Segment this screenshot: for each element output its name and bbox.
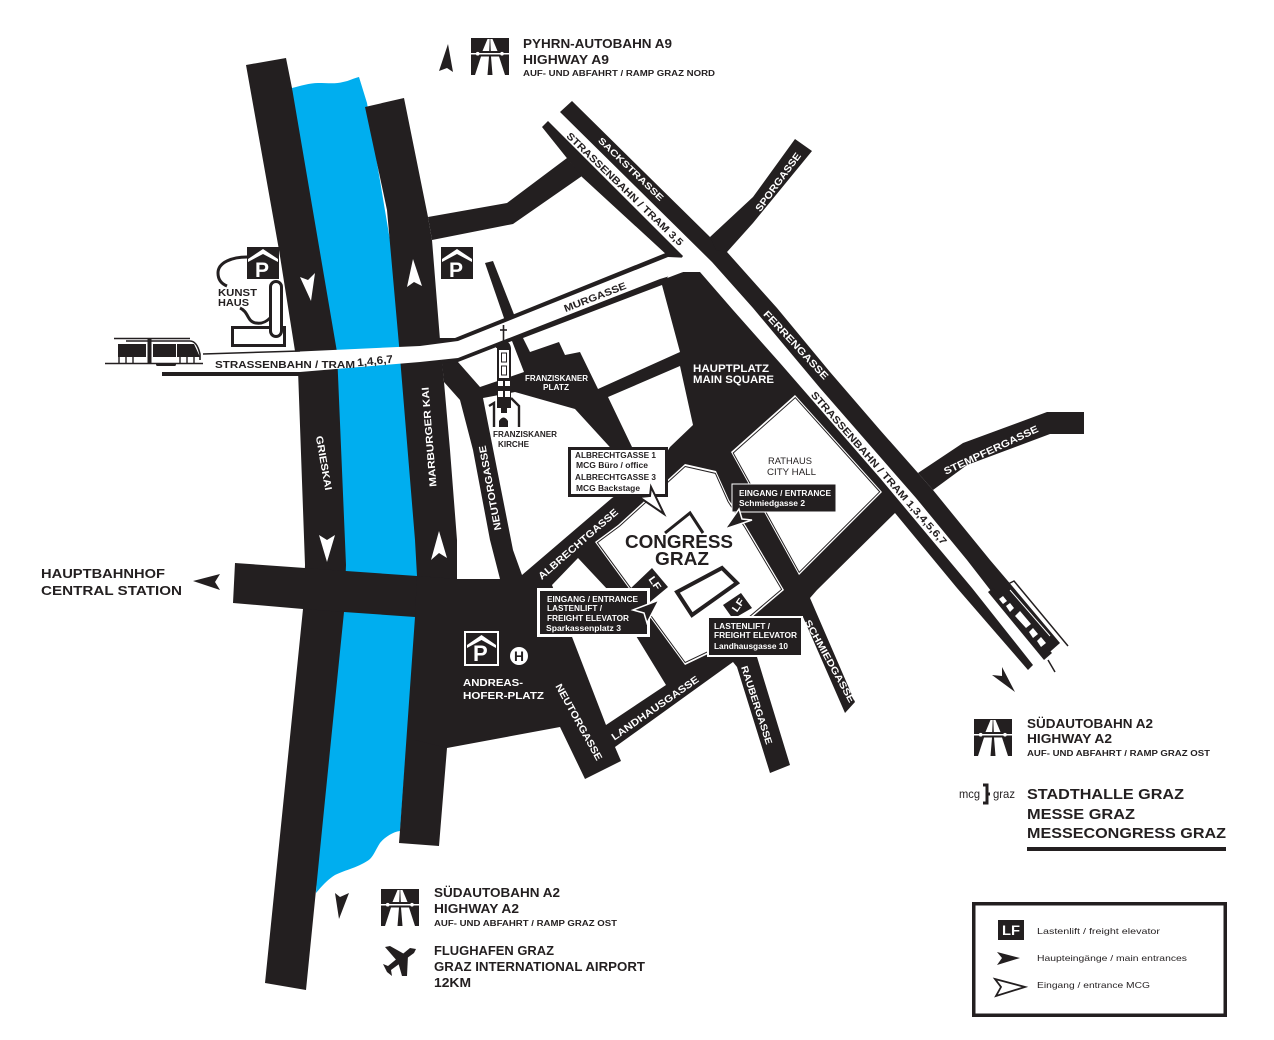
congress roof chevron <box>665 513 703 533</box>
highway info: A9: HIGHWAY A9 <box>523 53 609 67</box>
Murgasse tram edge <box>438 252 683 364</box>
road: Sporgasse <box>710 139 812 252</box>
icon: parking Andreas-Hofer-Platz <box>465 632 498 666</box>
direction arrows on roads <box>300 259 447 562</box>
street label: Albrechtgasse: ALBRECHTGASSE <box>537 507 621 582</box>
icon: bus stop H <box>510 647 528 665</box>
Kunsthaus building <box>218 257 284 346</box>
venue names <box>1027 786 1226 851</box>
block: Rathaus <box>731 395 882 575</box>
icon: tram west <box>105 338 203 366</box>
Kunsthaus building: HAUS <box>218 298 249 309</box>
icon: motorway A2 south <box>381 889 419 926</box>
Kunsthaus building: KUNST <box>218 288 257 299</box>
road: Grieskai <box>246 58 346 990</box>
block: west of Hauptplatz <box>608 366 693 480</box>
airport info: FLUGHAFEN GRAZ <box>434 944 554 958</box>
arrow: Marburger Kai upper <box>407 259 422 287</box>
road: short lane to Murgasse <box>485 261 515 321</box>
arrow: to central station <box>193 574 220 590</box>
icon: bus stop H: H <box>514 648 524 664</box>
street label: Strassenbahn 3,5: STRASSENBAHN / TRAM 3,5 <box>564 131 685 249</box>
Rathaus outline <box>733 398 880 572</box>
airport info <box>434 944 645 990</box>
legend: LF key letters: LF <box>1002 922 1020 938</box>
callout: Schmiedgasse entrance: EINGANG / ENTRANCE <box>739 489 832 498</box>
legend: LF key <box>998 920 1024 940</box>
legend: main entrance arrow <box>997 952 1020 965</box>
block: north of Hauptplatz <box>523 285 680 389</box>
legend: MCG entrance arrow <box>995 979 1025 996</box>
LF tag 1 <box>630 568 668 602</box>
road: main east-west road <box>233 563 530 620</box>
highway info: A2 south: SÜDAUTOBAHN A2 <box>434 885 560 900</box>
callout: Landhausgasse freight elevator: LASTENLIFT / <box>714 622 771 631</box>
icon: parking Marburger Kai: P <box>449 259 463 282</box>
block: Neutorgasse to Albrechtgasse <box>483 392 640 575</box>
icon: motorway A2 east <box>974 719 1012 756</box>
legend: main entrance text: Haupteingänge / main entrances <box>1037 953 1187 963</box>
street label: Neutorgasse south: NEUTORGASSE <box>552 682 604 763</box>
street label: Stempfergasse: STEMPFERGASSE <box>942 424 1041 478</box>
arrow: Grieskai upper <box>300 273 315 301</box>
street label: Ferrengasse: FERRENGASSE <box>761 309 830 383</box>
label: Franziskaner Kirche <box>493 430 557 449</box>
street label: Marburger Kai: MARBURGER KAI <box>420 386 439 487</box>
label: central station <box>41 566 182 598</box>
highway info: A2 south: AUF- UND ABFAHRT / RAMP GRAZ OST <box>434 919 617 928</box>
callout: Albrechtgasse: MCG Backstage <box>576 484 641 493</box>
tram rail edges <box>162 351 300 374</box>
title: Congress Graz <box>625 531 733 569</box>
LF tag 2 <box>723 593 752 619</box>
LF tag 2: LF <box>730 597 747 614</box>
label: Andreas-Hofer-Platz: ANDREAS- <box>463 677 524 689</box>
street labels <box>215 131 1041 763</box>
logo: mcg graz <box>959 785 1015 803</box>
LF tag 1: LF <box>646 575 663 592</box>
airport info: 12KM <box>434 976 471 990</box>
highway info: A2 east <box>1027 716 1210 758</box>
arrow: south-west to A2 <box>335 893 349 919</box>
street label: Sackstrasse: SACKSTRASSE <box>596 135 666 203</box>
street label: Strassenbahn west: STRASSENBAHN / TRAM <box>215 360 355 371</box>
legend: freight elevator text: Lastenlift / freight elevator <box>1037 926 1160 936</box>
callout: Albrechtgasse: ALBRECHTGASSE 1 <box>575 451 657 460</box>
icon: Franziskaner church <box>489 325 519 427</box>
arrow: Marburger Kai lower <box>431 531 447 560</box>
callout: Sparkassenplatz entrance: FREIGHT ELEVATOR <box>547 614 629 623</box>
callout: Sparkassenplatz entrance: LASTENLIFT / <box>547 604 603 613</box>
pointer: Schmiedgasse entrance <box>725 509 752 529</box>
arrow: Grieskai lower <box>319 535 335 562</box>
street label: Sporgasse: SPORGASSE <box>754 151 804 214</box>
block: Congress building <box>595 464 784 665</box>
street label: tram numbers west: 1,4,6,7 <box>357 354 394 369</box>
pointer: Sparkassenplatz entrance <box>633 600 659 623</box>
logo: mcg graz: graz <box>993 787 1015 801</box>
city centre streets <box>415 271 895 779</box>
highway info: A9: PYHRN-AUTOBAHN A9 <box>523 37 672 51</box>
road: north tram side strip <box>542 121 683 256</box>
highway info: A2 east: AUF- UND ABFAHRT / RAMP GRAZ OST <box>1027 749 1210 758</box>
label: Hauptplatz: MAIN SQUARE <box>693 374 774 386</box>
street network <box>233 58 1084 990</box>
label: Franziskaner Kirche: FRANZISKANER <box>493 430 557 439</box>
icon: parking Kunsthaus: P <box>255 259 269 282</box>
label: central station: HAUPTBAHNHOF <box>41 566 165 581</box>
highway info: A9 <box>523 37 715 78</box>
legend: MCG entrance text: Eingang / entrance MCG <box>1037 980 1150 990</box>
block: beside the church <box>458 341 524 387</box>
label: Rathaus: CITY HALL <box>767 467 816 478</box>
highway info: A2 east: SÜDAUTOBAHN A2 <box>1027 716 1153 731</box>
label: Franziskaner Kirche: KIRCHE <box>498 440 530 449</box>
legend <box>974 904 1225 1015</box>
venue names: MESSECONGRESS GRAZ <box>1027 825 1226 842</box>
label: Andreas-Hofer-Platz <box>463 677 545 702</box>
airport info: GRAZ INTERNATIONAL AIRPORT <box>434 960 645 974</box>
icon: parking Andreas-Hofer-Platz: P <box>473 641 488 666</box>
street label: Schmiedgasse: SCHMIEDGASSE <box>802 618 856 705</box>
road: south tram side strip <box>880 478 1033 670</box>
street label: Landhausgasse: LANDHAUSGASSE <box>610 674 702 743</box>
callout: Sparkassenplatz entrance <box>538 590 659 636</box>
highway info: A2 south <box>434 885 617 928</box>
venue names: STADTHALLE GRAZ <box>1027 786 1184 803</box>
label: Franziskaner Platz <box>525 374 588 392</box>
label: Andreas-Hofer-Platz: HOFER-PLATZ <box>463 690 545 702</box>
highway info: A9: AUF- UND ABFAHRT / RAMP GRAZ NORD <box>523 69 715 78</box>
highway info: A2 south: HIGHWAY A2 <box>434 902 519 916</box>
callout: Landhausgasse freight elevator <box>708 617 802 656</box>
street label: Grieskai: GRIESKAI <box>313 435 333 491</box>
logo: mcg graz: mcg <box>959 787 980 801</box>
label: Hauptplatz <box>693 363 774 386</box>
arrow: north to A9 <box>439 44 453 72</box>
congress building footprint <box>677 568 737 615</box>
icon: parking Marburger Kai <box>441 247 473 282</box>
label: Hauptplatz: HAUPTPLATZ <box>693 363 769 375</box>
callout: Albrechtgasse <box>570 448 666 514</box>
label: Rathaus <box>767 456 816 478</box>
street label: Neutorgasse north: NEUTORGASSE <box>478 444 504 531</box>
callout: Albrechtgasse: MCG Büro / office <box>576 461 649 470</box>
callout: Albrechtgasse: ALBRECHTGASSE 3 <box>575 473 657 482</box>
callout: Sparkassenplatz entrance: Sparkassenplatz 3 <box>546 624 622 633</box>
icon: airplane <box>383 946 416 976</box>
label: Franziskaner Platz: FRANZISKANER <box>525 374 588 383</box>
road: Stempfergasse <box>918 412 1084 490</box>
pointer: Albrechtgasse entrance <box>639 487 664 514</box>
road: Sackstrasse and Ferrengasse <box>560 101 1060 658</box>
callout: Schmiedgasse entrance <box>725 484 836 529</box>
arrow: south-east to A2 <box>992 667 1015 692</box>
icon: parking Kunsthaus <box>247 247 279 282</box>
city blocks <box>458 285 882 725</box>
road: north connector <box>428 158 582 240</box>
street label: Murgasse: MURGASSE <box>563 281 628 315</box>
label: central station: CENTRAL STATION <box>41 583 182 598</box>
title: Congress Graz: CONGRESS <box>625 531 733 552</box>
icon: motorway A9 <box>471 38 509 75</box>
callout: Sparkassenplatz entrance: EINGANG / ENTRANCE <box>547 595 639 604</box>
block: Landhausgasse <box>552 558 666 725</box>
label: Rathaus: RATHAUS <box>768 456 812 467</box>
callout: Landhausgasse freight elevator: Landhausgasse 10 <box>714 642 789 651</box>
highway info: A2 east: HIGHWAY A2 <box>1027 732 1112 746</box>
callout: Landhausgasse freight elevator: FREIGHT ELEVATOR <box>714 631 797 640</box>
tram line along Murgasse <box>203 257 700 372</box>
title: Congress Graz: GRAZ <box>655 548 709 569</box>
street label: Raubergasse: RAUBERGASSE <box>738 665 774 746</box>
river Mur <box>292 77 420 893</box>
callout: Schmiedgasse entrance: Schmiedgasse 2 <box>739 499 806 508</box>
street label: Strassenbahn 1,3,4,5,6,7: STRASSENBAHN / TRAM 1,3,4,5,6,7 <box>808 390 949 548</box>
road: Marburger Kai <box>365 98 457 846</box>
label: Franziskaner Platz: PLATZ <box>543 383 569 392</box>
venue names: MESSE GRAZ <box>1027 806 1135 823</box>
icon: tram south <box>988 581 1068 672</box>
Congress building outline <box>597 467 782 662</box>
